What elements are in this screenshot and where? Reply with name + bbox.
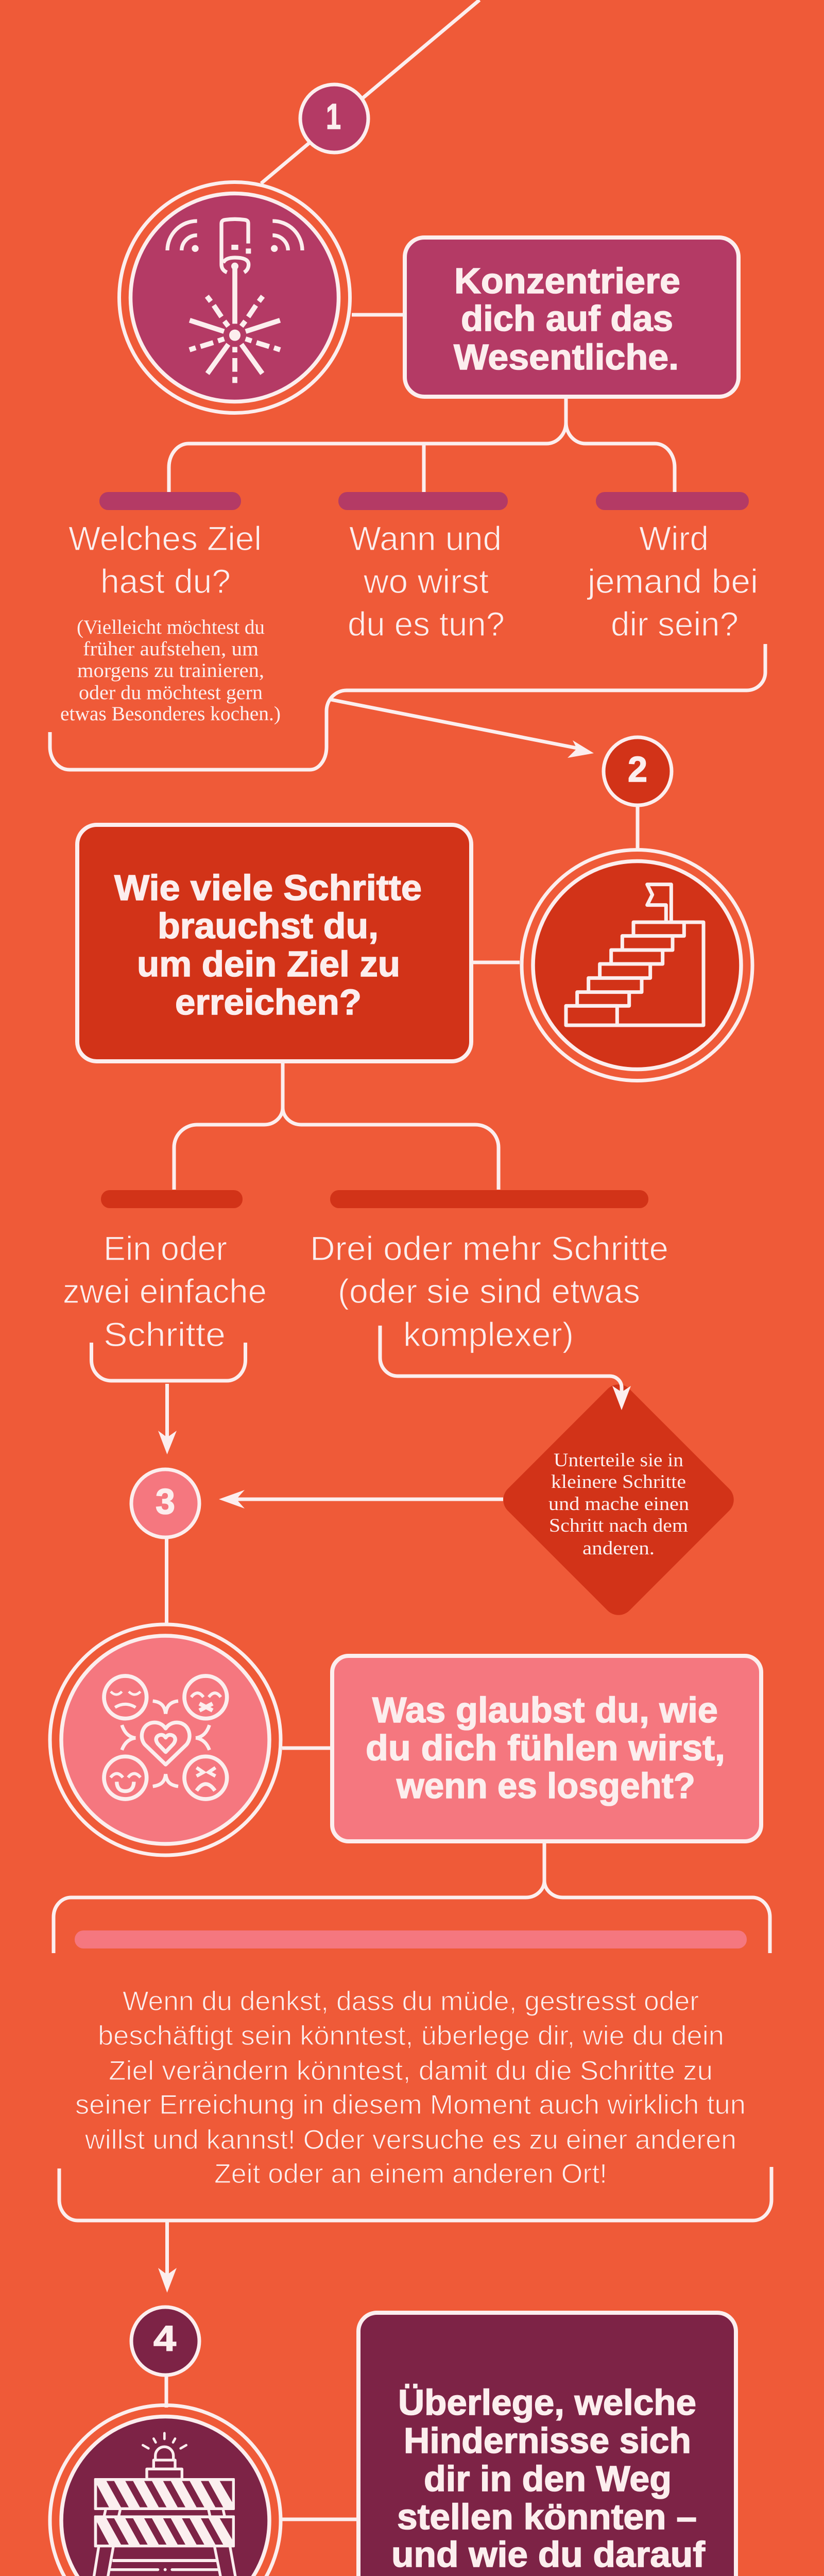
connector: bracket leading to step 2 (50, 644, 765, 770)
step badge 2: 2 (628, 749, 647, 789)
paragraph: if you feel tired: Wenn du denkst, dass du müde, gestresst oder (123, 1986, 699, 2016)
step badge 2 (604, 737, 672, 805)
diamond: break into smaller steps (497, 1378, 740, 1621)
paragraph: if you feel tired: Zeit oder an einem anderen Ort! (214, 2159, 607, 2189)
heading box: Konzentriere: Konzentriere (454, 261, 680, 301)
heading box: Was glaubst du: wenn es losgeht? (396, 1766, 695, 1806)
heading box: Was glaubst du: Was glaubst du, wie (372, 1690, 718, 1730)
option: three or more steps (310, 1229, 668, 1353)
icon: road barrier with warning light (50, 2405, 281, 2576)
paragraph: if you feel tired (75, 1986, 746, 2189)
note: example goals: morgens zu trainieren, (77, 659, 264, 682)
note: example goals: früher aufstehen, um (83, 638, 259, 660)
paragraph: if you feel tired: Ziel verändern könntest, damit du die Schritte zu (109, 2056, 713, 2086)
icon: emotion faces and heart (50, 1624, 281, 1855)
heading box: obstacles: Hindernisse sich (404, 2420, 691, 2461)
question: Wann und wo: Wann und (349, 519, 502, 557)
connector: incoming diagonal line (261, 0, 479, 183)
connector: bracket under first option (92, 1343, 245, 1381)
connector: badge to icon (165, 2377, 168, 2408)
heading box: Wie viele Schritte: um dein Ziel zu (137, 944, 400, 984)
heading box: Wie viele Schritte (77, 825, 471, 1061)
bar: question one (99, 492, 241, 510)
paragraph: if you feel tired: beschäftigt sein könntest, überlege dir, wie du dein (98, 2021, 724, 2051)
arrow: to step 2 (331, 700, 594, 758)
question: Wann und wo (348, 519, 505, 643)
paragraph: if you feel tired: seiner Erreichung in diesem Moment auch wirklich tun (75, 2090, 746, 2120)
diamond: break into smaller steps: und mache einen (548, 1494, 689, 1515)
heading box: Wie viele Schritte: Wie viele Schritte (114, 868, 422, 908)
heading box: obstacles: stellen könnten – (397, 2497, 697, 2537)
arrow: second option into diamond (380, 1326, 631, 1410)
option: three or more steps: (oder sie sind etwas (338, 1272, 640, 1310)
connector: two-way bracket (174, 1063, 499, 1190)
option: one or two steps: Ein oder (104, 1229, 227, 1267)
connector: three-way bracket (169, 398, 675, 492)
option: one or two steps: Schritte (104, 1315, 226, 1353)
bar: question three (596, 492, 749, 510)
diamond: break into smaller steps: kleinere Schritte (551, 1471, 686, 1493)
note: example goals: oder du möchtest gern (79, 682, 263, 704)
step badge 4: 4 (153, 2318, 176, 2359)
arrow: first option to step 3 (158, 1384, 177, 1454)
note: example goals: etwas Besonderes kochen.) (60, 703, 281, 725)
heading box: Was glaubst du (332, 1656, 761, 1841)
heading box: obstacles (358, 2313, 736, 2576)
section 2: how many steps (63, 737, 752, 1621)
bar: many steps (330, 1190, 648, 1208)
barrier board: upper (94, 2478, 235, 2510)
heading box: obstacles: und wie du darauf (391, 2534, 706, 2574)
icon: laser pointer with sparks (119, 182, 350, 413)
diamond: break into smaller steps: Unterteile sie in (554, 1450, 683, 1471)
step badge 3: 3 (156, 1481, 175, 1521)
note: example goals (60, 616, 281, 725)
heading box: Wie viele Schritte: erreichen? (175, 982, 362, 1022)
question: Welches Ziel: hast du? (100, 562, 231, 600)
connector: badge to icon (636, 807, 640, 848)
option: one or two steps (63, 1229, 267, 1353)
icon: staircase with flag (522, 850, 752, 1081)
diamond: break into smaller steps: anderen. (582, 1538, 655, 1559)
question: Wann und wo: du es tun? (348, 605, 505, 643)
connector: bracket above text (54, 1843, 770, 1953)
step badge 4 (131, 2307, 199, 2375)
bar: section 3 (75, 1930, 747, 1948)
paragraph: if you feel tired: willst und kannst! Oder versuche es zu einer anderen (84, 2125, 736, 2155)
arrow: diamond to step 3 (219, 1490, 503, 1509)
bar: few steps (101, 1190, 243, 1208)
option: three or more steps: Drei oder mehr Schritte (310, 1229, 668, 1267)
step badge 1 (300, 84, 368, 152)
connector: badge to icon (165, 1539, 168, 1623)
section 4: obstacles and confidence scale (49, 2307, 780, 2576)
diamond: break into smaller steps: Schritt nach dem (549, 1515, 688, 1536)
question: Wird jemand: dir sein? (611, 605, 739, 643)
heading box: Was glaubst du: du dich fühlen wirst, (366, 1728, 725, 1768)
heading box: Konzentriere (405, 238, 739, 397)
connector: icon to heading (473, 960, 520, 964)
section 1: focus on the essentials (50, 0, 765, 770)
heading box: Konzentriere: Wesentliche. (454, 337, 679, 377)
connector: bracket below text (59, 2167, 771, 2221)
step badge 3 (131, 1469, 199, 1537)
question: Wann und wo: wo wirst (363, 562, 489, 600)
question: Wird jemand: jemand bei (587, 562, 758, 600)
question: Welches Ziel: Welches Ziel (68, 519, 262, 557)
heading box: obstacles: dir in den Weg (424, 2459, 672, 2499)
bar: question two (338, 492, 508, 510)
connector: icon to heading (282, 1747, 330, 1750)
heading box: obstacles: Überlege, welche (398, 2382, 696, 2422)
connector: icon to heading (282, 2517, 356, 2521)
connector: icon to heading (352, 313, 403, 316)
question: Welches Ziel (68, 519, 262, 600)
heading box: Wie viele Schritte: brauchst du, (158, 906, 379, 946)
option: one or two steps: zwei einfache (63, 1272, 267, 1310)
section 3: how will you feel (50, 1469, 771, 2293)
barrier board: lower (94, 2515, 235, 2547)
question: Wird jemand (587, 519, 758, 643)
step badge 1: 1 (326, 96, 341, 137)
option: three or more steps: komplexer) (403, 1315, 574, 1353)
arrow: to step 4 (158, 2222, 177, 2293)
note: example goals: (Vielleicht möchtest du (77, 616, 265, 638)
question: Wird jemand: Wird (639, 519, 709, 557)
heading box: Konzentriere: dich auf das (461, 298, 673, 338)
